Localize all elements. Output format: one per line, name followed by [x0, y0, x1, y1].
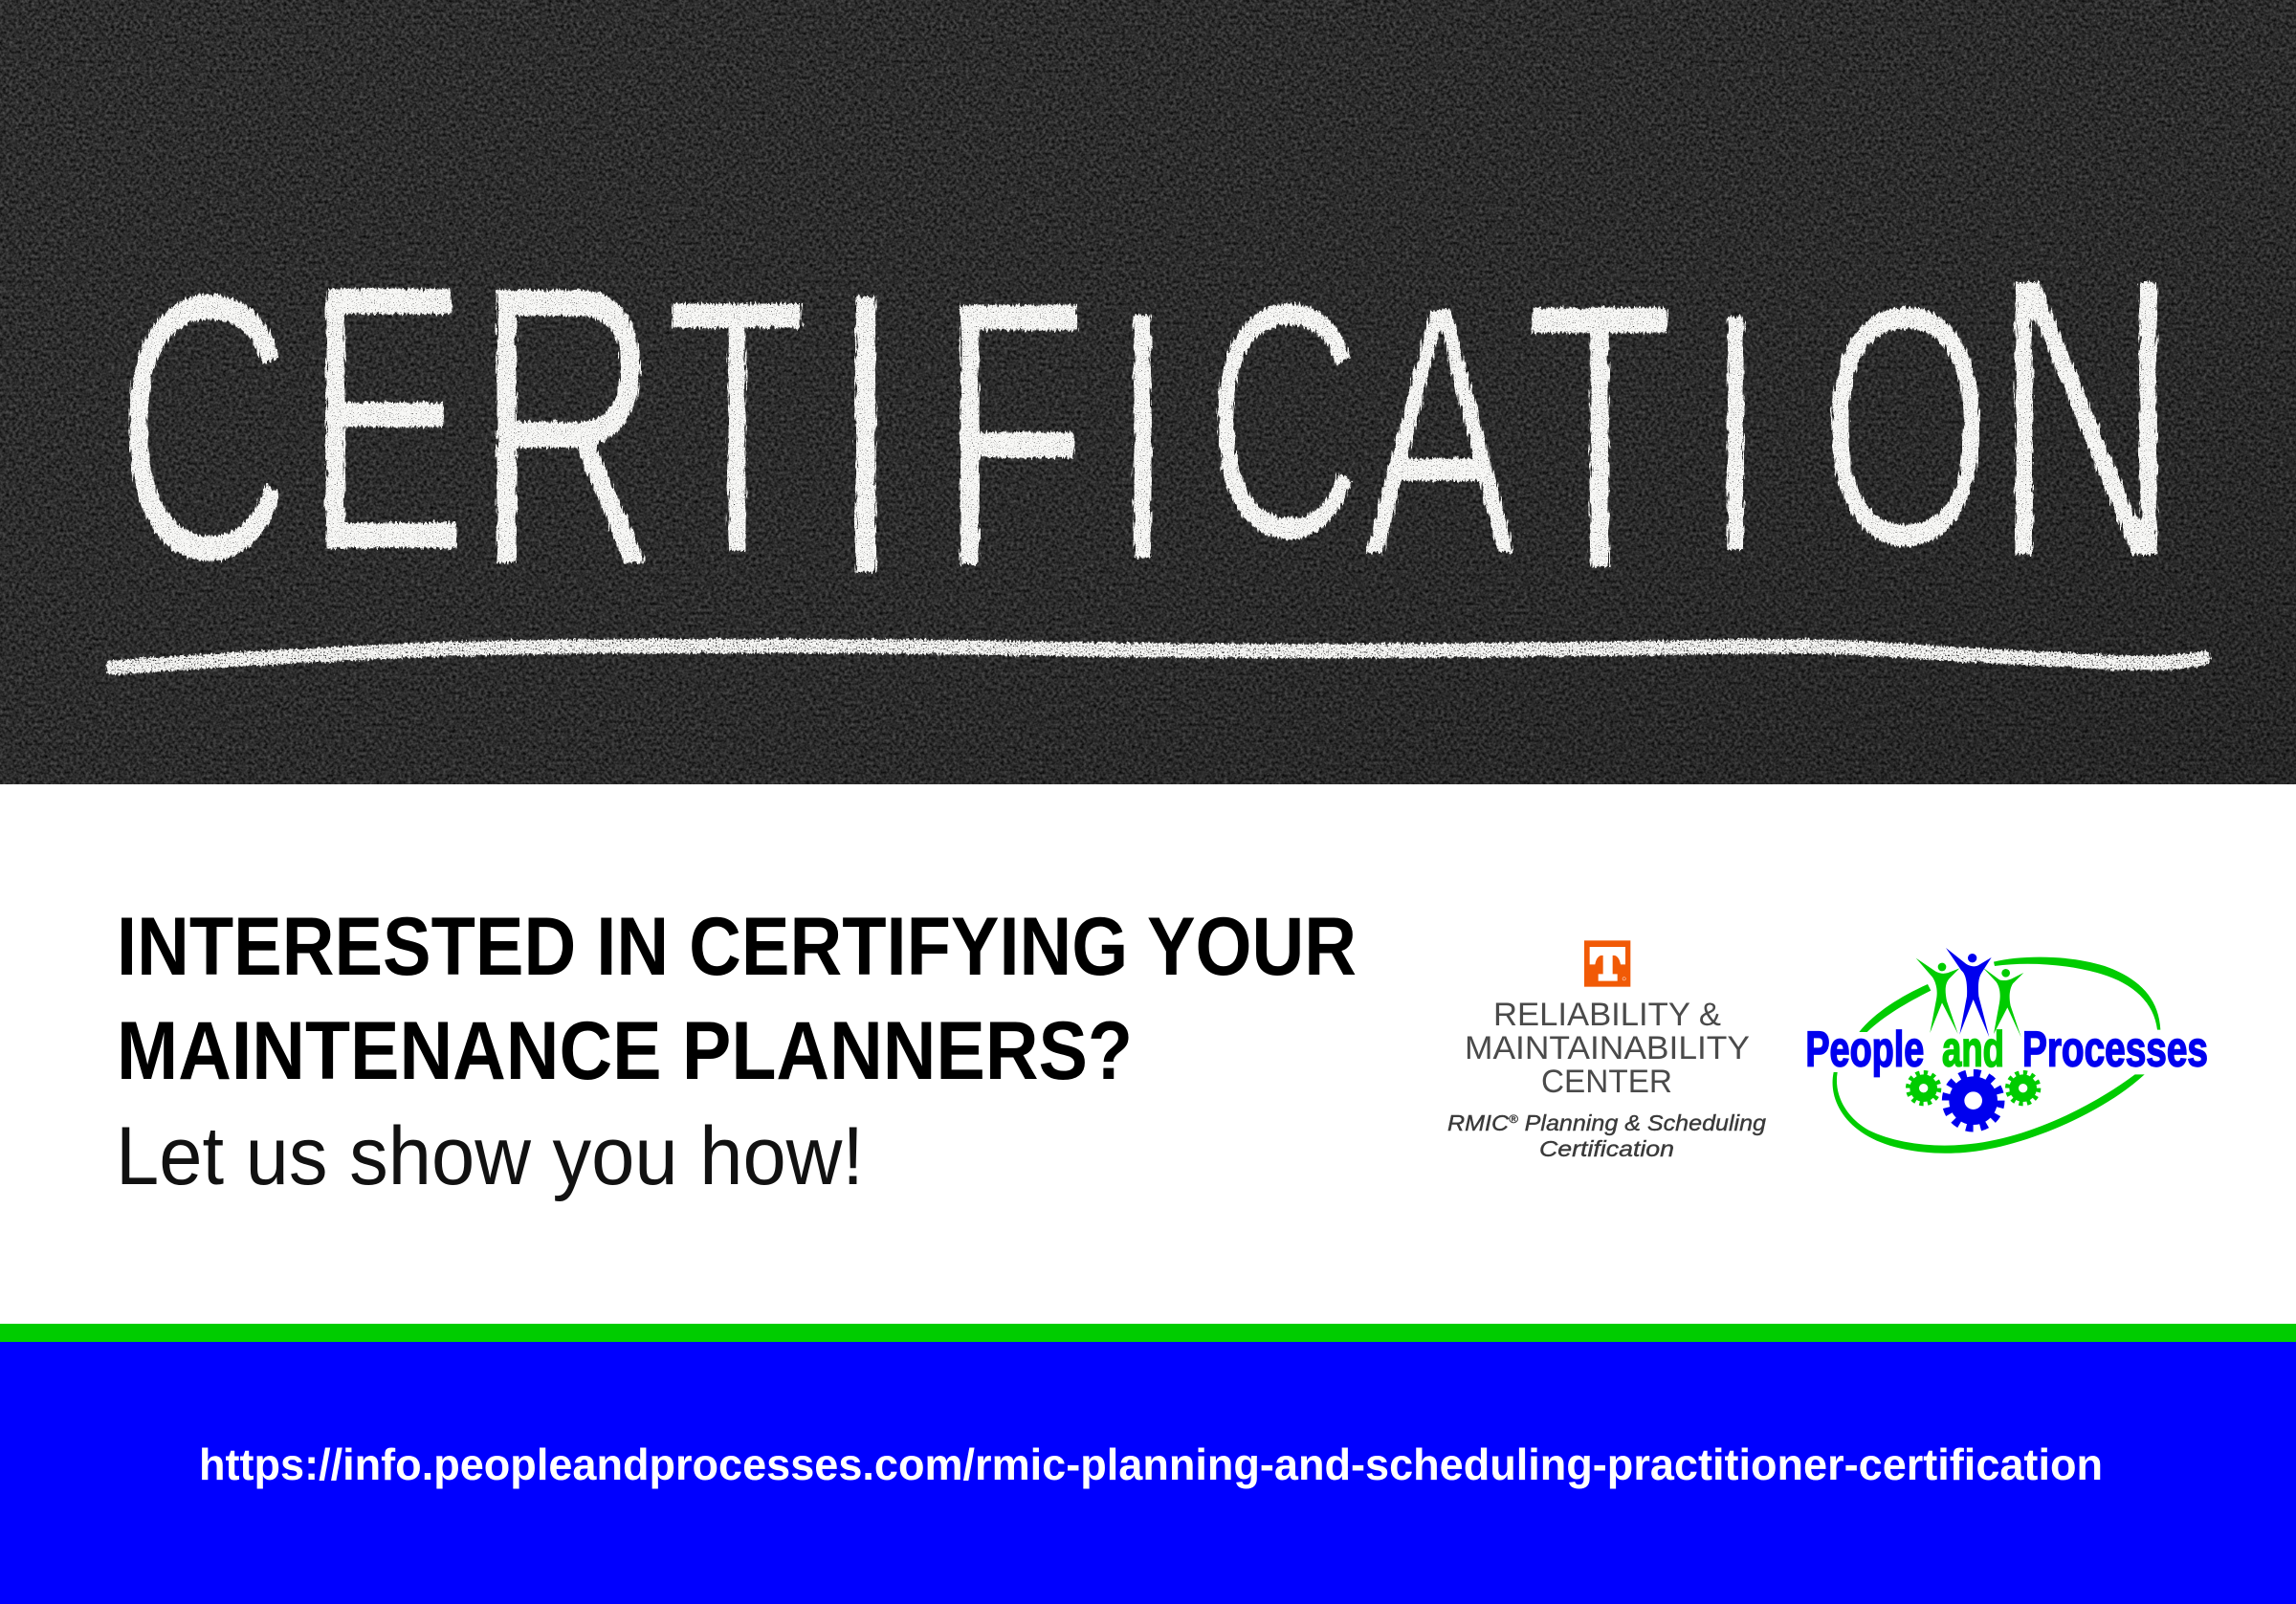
chalk word: CERTIFICATION: E [303, 206, 470, 631]
heading: interested in certifying: INTERESTED IN CERTIFYING YOUR [117, 901, 1357, 993]
chalk word: CERTIFICATION: T [1524, 225, 1675, 650]
logo: people and processes [1805, 948, 2208, 1154]
icon: orange T square [1584, 940, 1630, 987]
chalk word: CERTIFICATION: R [474, 202, 662, 650]
chalk word: CERTIFICATION: C [114, 215, 294, 641]
heading: maintenance planners: MAINTENANCE PLANNERS? [117, 1005, 1133, 1097]
chalk word: CERTIFICATION: F [938, 222, 1090, 648]
text: rmic planning and scheduling: RMIC [1447, 1110, 1504, 1135]
chalk word: CERTIFICATION: C [1203, 232, 1363, 611]
icon: gears [1909, 1073, 2039, 1128]
chalk word: CERTIFICATION: T [665, 223, 809, 629]
text: rmic planning and scheduling: ® [1509, 1112, 1518, 1126]
chalk underline [113, 646, 2203, 668]
text: center: CENTER [1541, 1064, 1672, 1100]
text: maintainability: MAINTAINABILITY [1465, 1030, 1750, 1066]
text: reliability and: RELIABILITY & [1493, 997, 1721, 1033]
text: rmic planning and scheduling: Planning & Scheduling [1518, 1110, 1766, 1135]
panel: blue footer with url [0, 1342, 2296, 1604]
wordmark: People and Processes [1805, 1022, 2208, 1077]
panel: chalkboard hero [0, 0, 2296, 784]
text: certification: Certification [1539, 1136, 1674, 1161]
subheading: let us show you how: Let us show you how! [116, 1110, 864, 1202]
url text: https://info.peopleandprocesses.com/rmic-planning-and-scheduling-practitioner-certification [199, 1439, 2103, 1489]
wordmark: People and Processes: and [1942, 1022, 2004, 1077]
chalk word: CERTIFICATION: N [1992, 194, 2180, 643]
chalk word: CERTIFICATION: O [1819, 234, 1993, 619]
green divider strip [0, 1324, 2296, 1342]
chalk word: CERTIFICATION: I [1110, 236, 1175, 637]
chalk word: CERTIFICATION: I [1705, 241, 1767, 626]
chalk word: CERTIFICATION: A [1362, 231, 1519, 632]
wordmark: People and Processes: Processes [2022, 1022, 2208, 1077]
icon: three people [1916, 948, 2023, 1037]
logo: reliability and maintainability center [1447, 940, 1766, 1161]
panel: message and logos [116, 901, 2208, 1202]
green oval swoosh [1833, 957, 2160, 1154]
wordmark: People and Processes: People [1805, 1022, 1924, 1077]
chalk word: CERTIFICATION: I [828, 207, 902, 660]
chalk word: CERTIFICATION [114, 194, 2180, 660]
chalkboard background [0, 0, 2296, 784]
